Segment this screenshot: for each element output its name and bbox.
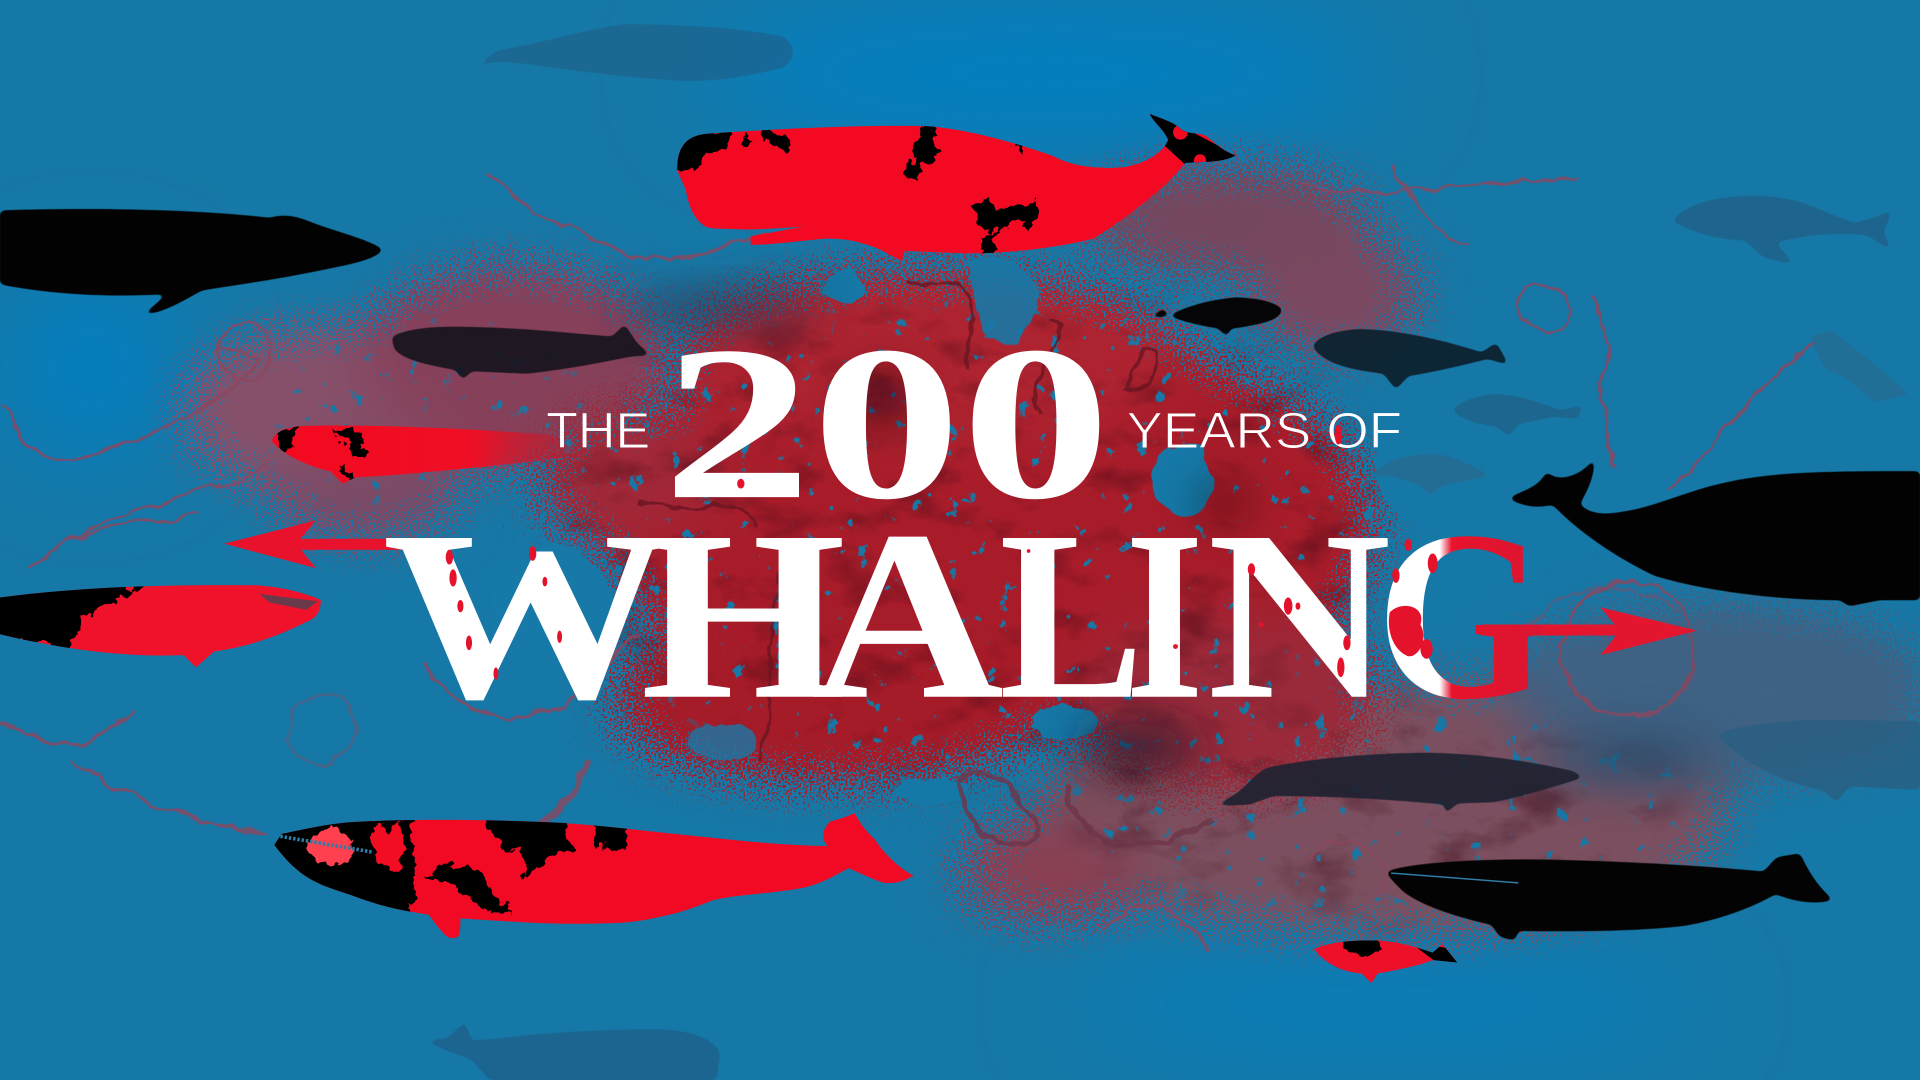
faded whale: lower right: [1717, 720, 1920, 802]
title: [382, 301, 1548, 750]
red whale: small bottom: [1314, 940, 1458, 984]
black whale: small humpback: [1149, 298, 1282, 337]
faded whale: upper right: [1673, 196, 1892, 264]
faded whale: under small: [1367, 454, 1490, 496]
black whale: large right: [1509, 458, 1920, 606]
red whale: bottom large: [260, 808, 913, 938]
title word: WHALING: N: [1207, 482, 1391, 750]
marbled vein lines: [0, 159, 1812, 955]
blood stain: red core: [551, 288, 1365, 778]
title line: YEARS OF: YEARS OF: [1127, 401, 1402, 459]
dark whale: humpback right: [1313, 329, 1509, 389]
faded whale: bottom: [426, 1022, 720, 1080]
title number: 200: 200: [662, 301, 1111, 545]
title word: WHALING: L: [999, 482, 1144, 750]
blue gaps in stain: [490, 259, 1478, 802]
title word: WHALING: I: [1125, 482, 1204, 750]
arrow: right: [1482, 607, 1697, 655]
faded whale: middle right small: [1452, 394, 1583, 436]
faded whale: far right: [1810, 331, 1910, 402]
title word: WHALING: [382, 482, 1548, 750]
dark clots in stain: [624, 291, 1714, 786]
dark whale: long rorqual: [1216, 753, 1583, 814]
black whale: top left: [0, 209, 383, 315]
black whale: bottom right: [1386, 853, 1833, 940]
red whale: middle: [272, 425, 582, 484]
title word: WHALING: W: [382, 482, 673, 750]
title line: THE: THE: [546, 401, 650, 459]
arrow: left: [224, 520, 416, 568]
red whale: left: [0, 585, 321, 668]
dark whale: bowhead behind title: [392, 324, 650, 380]
title word: WHALING: G: [1376, 482, 1548, 750]
blood stain: dark mottling: [563, 294, 1678, 906]
red whale: sperm whale top: [669, 108, 1239, 261]
title word: WHALING: H: [640, 482, 846, 750]
blood stain: faded haze: [196, 181, 1920, 918]
faded whale: top sperm whale: [476, 24, 793, 81]
blue flecks in stain: [269, 294, 1702, 918]
title word: WHALING: A: [811, 482, 1004, 750]
blood splatter on letters: [446, 425, 1438, 680]
